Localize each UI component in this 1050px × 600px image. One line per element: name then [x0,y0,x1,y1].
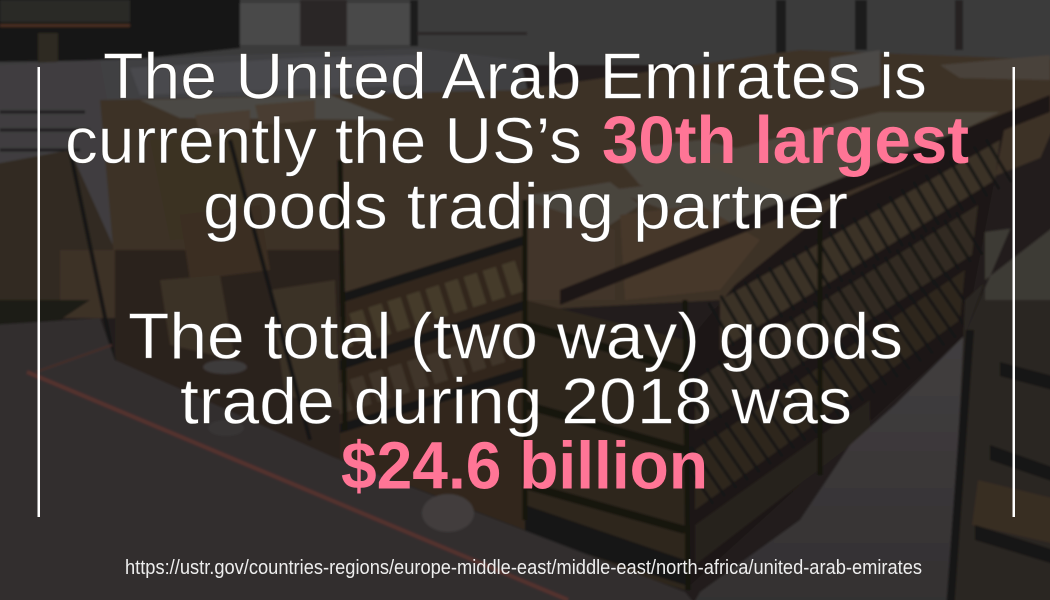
wall [0,0,1050,65]
heading: trading partner statement: The United Arab Emirates is [103,40,927,112]
left vertical rule [38,67,40,517]
left shelves with white stock [0,60,130,260]
floor [0,318,700,600]
heading: trading partner statement: currently the US’s [65,104,582,177]
heading: trading partner statement [65,40,969,242]
text block: total goods trade [128,300,903,504]
text block: total goods trade: The total (two way) goods [128,300,903,372]
text block: total goods trade: trade during 2018 was [180,364,852,438]
centre rack faces [525,300,685,590]
heading: trading partner statement: goods trading partner [203,170,848,242]
right face of centre rack [685,125,1005,590]
heading: trading partner statement: 30th largest [602,103,969,178]
right vertical rule [1012,67,1015,517]
stock and boxes [100,48,530,115]
right rack [950,215,1050,600]
source URL: https://ustr.gov/countries-regions/europe-middle-east/middle-east/north-africa/united-arab-emirates [125,557,922,579]
text block: total goods trade: $24.6 billion [341,428,708,504]
